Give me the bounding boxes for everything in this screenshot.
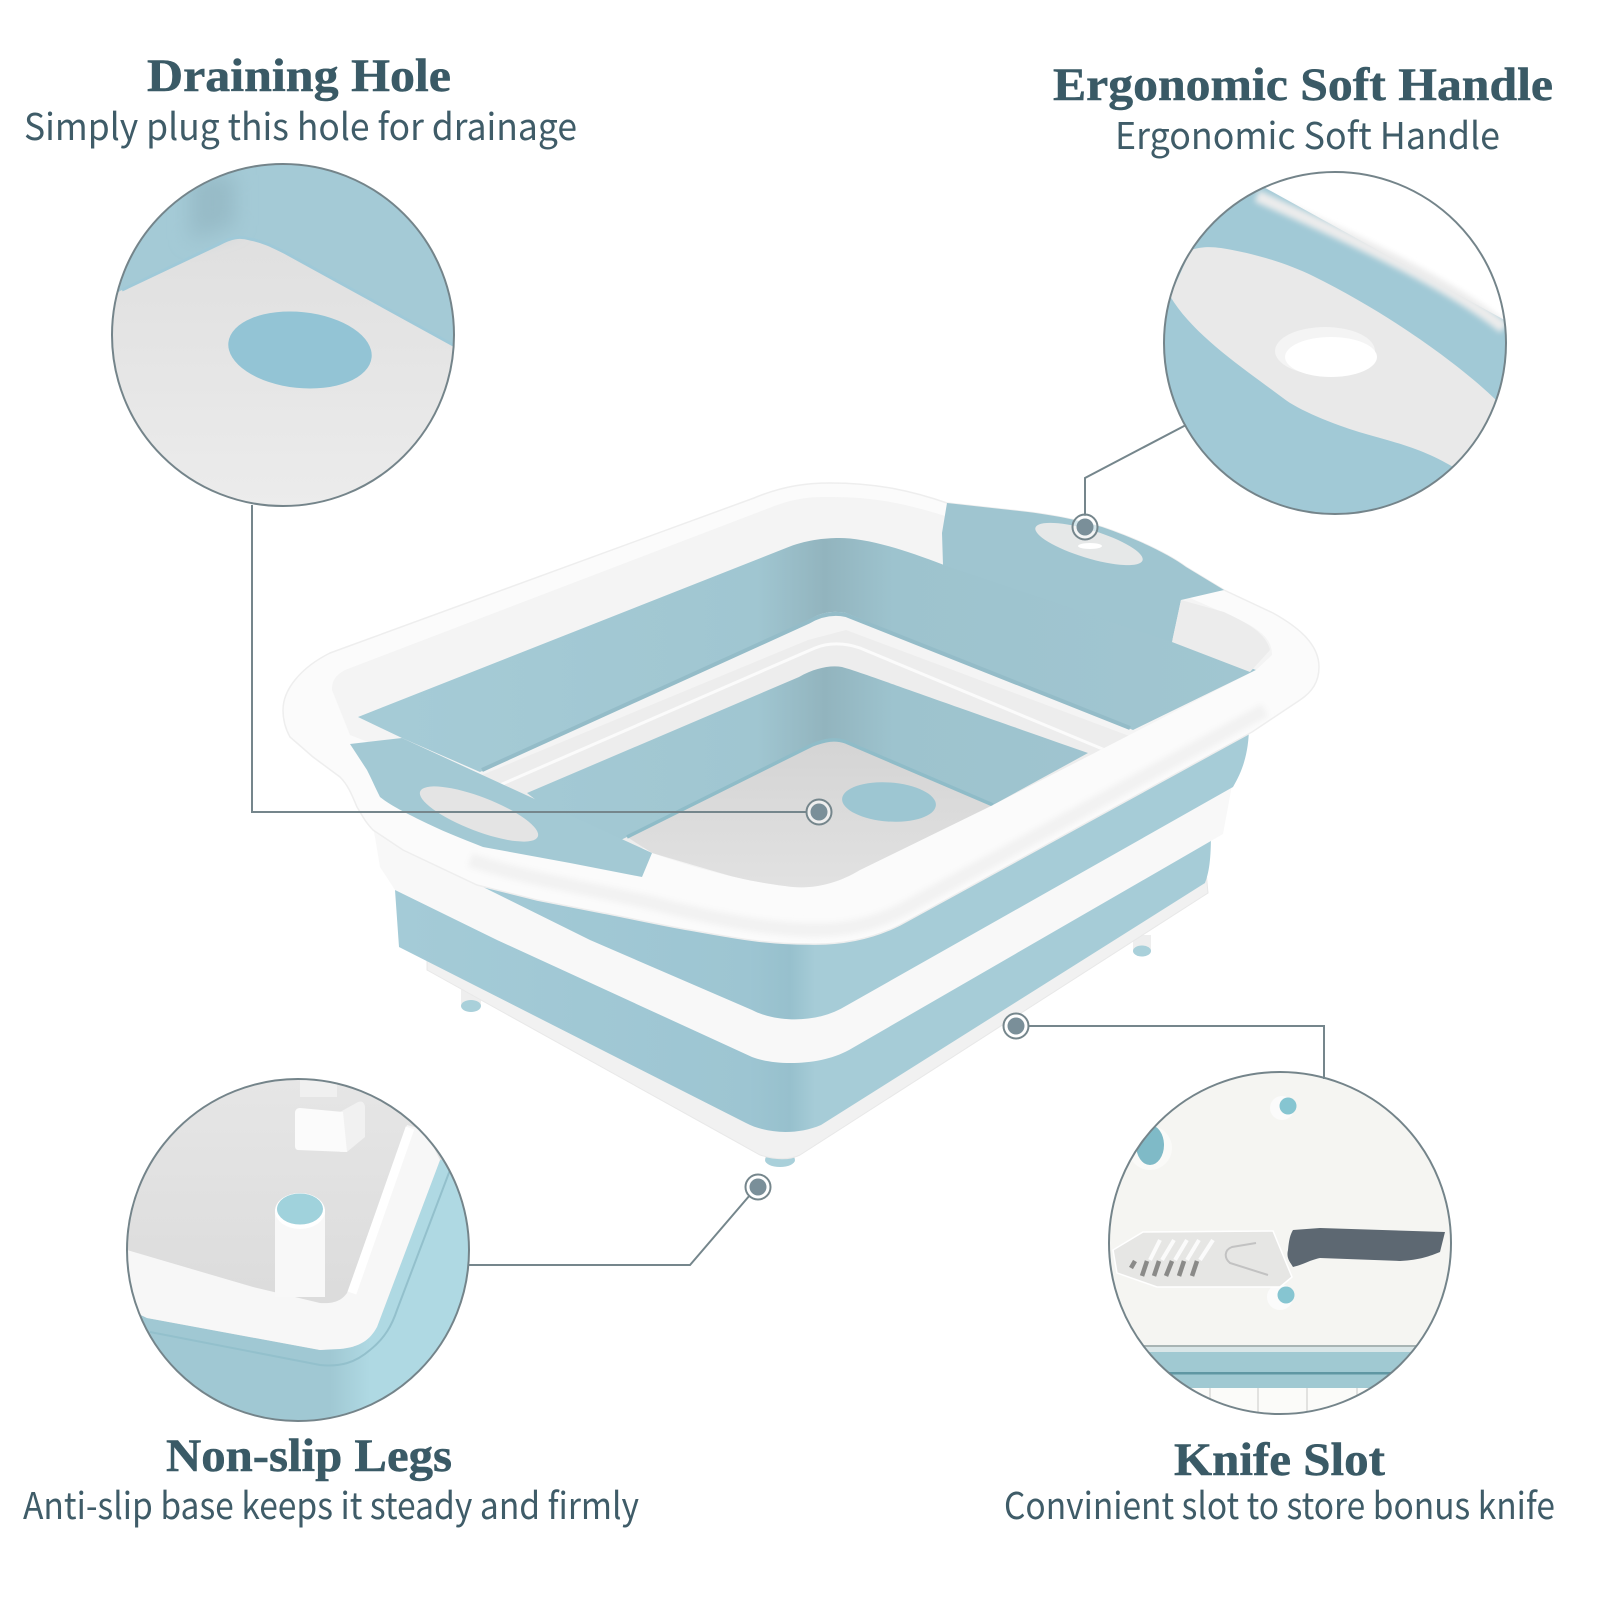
circle outline xyxy=(1109,1072,1451,1414)
teal wall xyxy=(118,165,453,343)
box top piece xyxy=(300,1080,337,1097)
description: knife slot: Convinient slot to store bonus knife xyxy=(1004,1476,1555,1530)
description: draining hole: Simply plug this hole for drainage xyxy=(24,97,577,151)
connector: non-slip legs xyxy=(468,1174,770,1265)
floor border xyxy=(627,740,993,837)
lower teal band xyxy=(395,830,1211,1132)
right foot xyxy=(1133,935,1151,956)
slats xyxy=(1210,1388,1357,1420)
lower inner wall xyxy=(527,666,1088,850)
marker xyxy=(806,800,832,824)
connector: knife slot xyxy=(1004,1014,1324,1079)
handle grip xyxy=(1170,247,1508,470)
circle outline xyxy=(127,1079,469,1421)
cover slots xyxy=(1131,1261,1197,1276)
draining plug xyxy=(841,779,937,825)
left foot xyxy=(461,985,481,1012)
marker xyxy=(1004,1014,1028,1038)
cover v-shape xyxy=(1226,1243,1268,1275)
basin rim xyxy=(283,483,1319,944)
teal body xyxy=(141,1160,468,1420)
edge highlight xyxy=(1257,196,1504,328)
heading: knife slot: Knife Slot xyxy=(1174,1434,1385,1486)
collapsible basin product xyxy=(283,480,1319,1167)
hole xyxy=(1285,337,1377,377)
circle outline xyxy=(1164,172,1506,514)
marker xyxy=(746,1174,770,1200)
upper inner wall xyxy=(358,538,1256,772)
leg pillar xyxy=(275,1209,325,1297)
rim highlight xyxy=(356,1126,406,1266)
leg cap xyxy=(277,1194,323,1224)
right handle opening xyxy=(1078,543,1102,549)
connector: draining hole xyxy=(252,505,832,824)
cover highlights xyxy=(1150,1240,1213,1260)
detail circle: ergonomic handle xyxy=(1158,170,1518,520)
base surface xyxy=(113,239,452,505)
blade cover xyxy=(1113,1231,1292,1287)
rim shading xyxy=(470,710,1265,930)
teal edge strip xyxy=(1100,1352,1460,1388)
description: non-slip legs: Anti-slip base keeps it steady and firmly xyxy=(23,1476,639,1530)
teal surface xyxy=(1165,188,1505,513)
wall corner shadow xyxy=(192,178,234,232)
basin interior xyxy=(358,538,1256,888)
detail circle: knife slot xyxy=(1100,1065,1460,1428)
pale strip xyxy=(1100,1347,1460,1352)
centre foot xyxy=(765,1145,795,1167)
plug xyxy=(228,312,372,388)
wall lip xyxy=(122,237,455,346)
outer white area xyxy=(1266,173,1504,320)
upper knob xyxy=(1270,1096,1294,1120)
inner lip xyxy=(300,480,1300,900)
upper teal band xyxy=(483,725,1249,1019)
hole shading xyxy=(1275,327,1375,375)
circle outline xyxy=(112,164,454,506)
box clip xyxy=(295,1108,347,1152)
teal groove xyxy=(150,1170,450,1365)
knife xyxy=(1113,1228,1445,1287)
upper knob cap xyxy=(1280,1098,1296,1114)
right handle hole xyxy=(1031,514,1147,574)
leg cap rim xyxy=(275,1193,325,1209)
rim xyxy=(120,1125,440,1350)
ledge highlight xyxy=(500,644,1105,785)
heading: ergonomic soft handle: Ergonomic Soft Handle xyxy=(1053,59,1553,111)
drain plug xyxy=(1136,1125,1164,1165)
box side xyxy=(340,1101,365,1152)
wall lower strip xyxy=(482,614,1130,770)
left handle xyxy=(350,738,652,877)
right handle xyxy=(942,503,1224,642)
base surface xyxy=(1110,1073,1450,1345)
base surface xyxy=(128,1080,442,1350)
marker xyxy=(1072,514,1098,540)
heading: non-slip legs: Non-slip Legs xyxy=(166,1430,452,1482)
detail circle: draining hole xyxy=(110,150,460,510)
knife handle xyxy=(1287,1228,1445,1267)
left handle hole xyxy=(414,776,544,852)
middle white band xyxy=(373,780,1233,1063)
heading: draining hole: Draining Hole xyxy=(147,50,451,102)
drain at edge xyxy=(1128,1126,1172,1170)
lower knob xyxy=(1267,1284,1293,1310)
detail circle: non-slip legs xyxy=(120,1075,480,1430)
connector: ergonomic handle xyxy=(1072,425,1186,540)
lower knob cap xyxy=(1278,1286,1294,1304)
basin floor xyxy=(627,740,993,892)
bottom gray line xyxy=(1100,1345,1460,1347)
right inner corner xyxy=(1172,600,1270,672)
white base tray xyxy=(427,860,1208,1159)
bottom white area xyxy=(1100,1388,1460,1428)
dark teal groove xyxy=(1100,1372,1460,1374)
description: ergonomic soft handle: Ergonomic Soft Handle xyxy=(1115,106,1500,160)
ledge between walls xyxy=(470,630,1140,850)
